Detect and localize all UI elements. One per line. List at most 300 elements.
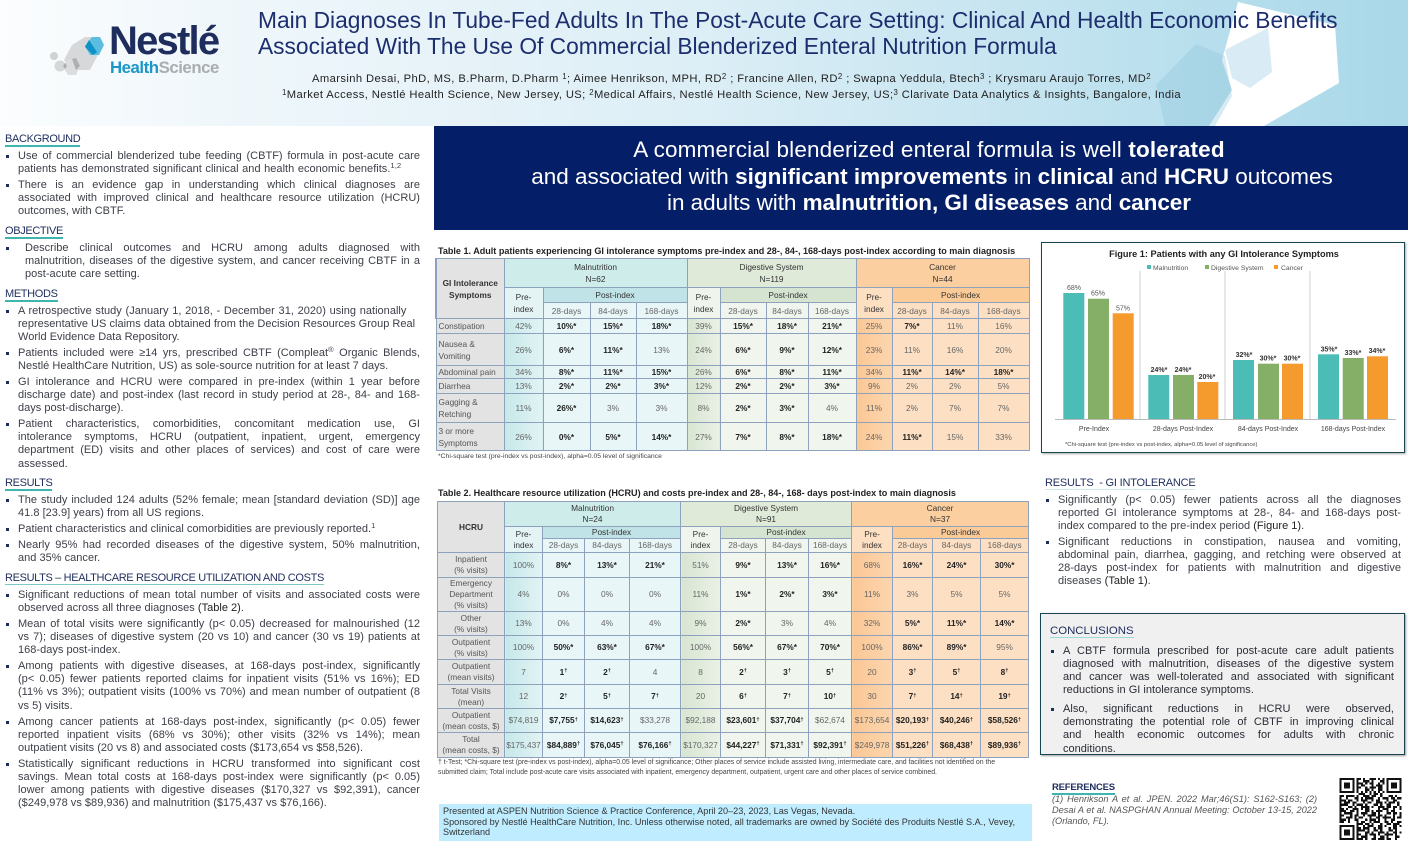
table 1: 18%*: [822, 432, 842, 442]
methods text 4: [18, 418, 420, 470]
table 2: 7†: [651, 691, 659, 701]
table 2: $7,755†: [549, 715, 578, 725]
table 2: N=91: [756, 514, 776, 524]
HCRU text 3: (p< 0.05) fewer patients reported claims for inpatient visits (51% vs 16%); ED: [18, 672, 420, 684]
HCRU text 3: (11% vs 3%); outpatient visits (100% vs 70%) and mean number of outpatient (8: [18, 686, 420, 698]
table 2: Pre-: [864, 528, 880, 538]
table 1: 11%: [947, 321, 963, 331]
HCRU text 3: Among patients with digestive diseases, at 168-days post-index, significantly: [18, 660, 420, 672]
table 2: 28-days: [728, 540, 758, 550]
table 1: 84-days: [940, 306, 970, 316]
HCRU text 2: [18, 618, 420, 656]
table 1: Pre-: [866, 292, 882, 302]
table 1: Diarrhea: [438, 381, 470, 391]
table 2: (mean costs, $): [442, 745, 500, 755]
table 2 title: Table 2. Healthcare resource utilization (HCRU) and costs pre-index and 28-, 84-, 168- days post-index to main diagnosis: [438, 488, 956, 498]
table 2: 10†: [824, 691, 836, 701]
figure 1 chart: 30%*: [1284, 356, 1301, 362]
table 1: 2%*: [605, 381, 621, 391]
table 1: 7%: [998, 403, 1010, 413]
key message banner: [434, 126, 1408, 230]
results text 2: Patient characteristics and clinical comorbidities are previously reported.1: [18, 521, 375, 534]
table 1: Malnutrition: [574, 262, 617, 272]
table 1: 3%*: [824, 381, 840, 391]
table 1: N=62: [585, 274, 606, 284]
table 1: 33%: [995, 432, 1012, 442]
conclusion 2: conditions.: [1063, 743, 1116, 755]
table 2: (mean visits): [447, 672, 495, 682]
table 1: 2%: [906, 403, 918, 413]
table 1: 5%*: [605, 432, 621, 442]
axis labels: 168-days Post-Index: [1321, 426, 1386, 433]
table 2: 84-days: [772, 540, 802, 550]
table 2: (% visits): [454, 600, 488, 610]
table 2: 70%*: [820, 642, 840, 652]
table 2: 11%*: [947, 618, 966, 628]
table 1: 7%*: [904, 321, 920, 331]
references text: (1) Henrikson A et al. JPEN. 2022 Mar;46(S1): S162-S163; (2): [1052, 794, 1317, 804]
table 2: 11%: [693, 589, 709, 599]
GI intolerance text 1: reported GI intolerance symptoms at 28-, 84- and 168-days post-: [1058, 506, 1401, 518]
background text 2: There is an evidence gap in understanding which clinical diagnoses are: [18, 178, 420, 190]
table 1: 3 or more: [438, 426, 474, 436]
key message banner: in adults with malnutrition, GI diseases and cancer: [667, 190, 1191, 215]
legend: [1147, 265, 1304, 272]
methods text 4: Patient characteristics, comorbidities, concomitant medication use, GI: [18, 418, 420, 430]
conclusion 1: reductions in GI intolerance symptoms.: [1063, 684, 1254, 696]
table 1: 7%: [949, 403, 961, 413]
table 2: 84-days: [592, 540, 622, 550]
chart title: Figure 1: Patients with any GI Intolerance Symptoms: [1109, 249, 1339, 259]
table 2: 24%*: [947, 560, 966, 570]
table 1: 3%: [607, 403, 619, 413]
axis labels: [1079, 426, 1386, 433]
table 2: 8%*: [556, 560, 571, 570]
table 2: 100%: [513, 642, 534, 652]
table 2: 4: [653, 666, 657, 676]
methods text 3: [18, 376, 420, 414]
table 1: 14%*: [945, 367, 965, 377]
table 1: 26%: [515, 344, 532, 354]
table 2: 13%*: [777, 560, 797, 570]
table 1: 34%: [515, 367, 532, 377]
table 1: 26%: [515, 432, 532, 442]
HCRU text 5: ($249,978 vs $89,936) and malnutrition ($175,437 vs $76,166).: [18, 796, 327, 808]
table 2: $71,331†: [770, 740, 804, 750]
table 1: 7%*: [735, 432, 751, 442]
bars: 168-days: [1318, 354, 1388, 419]
table 1: Pre-: [696, 292, 711, 302]
table 2: $84,889†: [547, 740, 580, 750]
table 2: 16%*: [903, 560, 922, 570]
table 2: 0%: [649, 589, 661, 599]
table 2: 8: [698, 666, 703, 676]
table 1: 11%*: [603, 367, 623, 377]
table 1: 16%: [995, 321, 1012, 331]
axis labels: 84-days Post-Index: [1238, 426, 1299, 433]
table 1: 2%*: [559, 381, 574, 391]
table 1: 26%: [695, 367, 712, 377]
HCRU text 4: [18, 716, 420, 754]
table 2: 28-days: [549, 540, 578, 550]
chart footnote: *Chi-square test (pre-index vs post-index, alpha=0.05 level of significance): [1065, 442, 1258, 448]
GI intolerance text 2: 28-days post-index for patients with malnutrition and digestive: [1058, 562, 1401, 574]
table 2: $173,654: [855, 715, 889, 725]
table 2: 0%: [558, 589, 570, 599]
results text 1: 41.8 [23.9] years) from all US regions.: [18, 506, 204, 518]
figure 1 chart: 20%*: [1199, 374, 1216, 381]
table 1: Cancer: [929, 262, 956, 272]
table 1: 24%: [866, 432, 882, 442]
results text 1: [18, 494, 420, 520]
table 2 footnote: [438, 758, 995, 776]
table 1: 3%*: [779, 403, 795, 413]
table 2: (mean costs, $): [442, 720, 500, 730]
table 2: 5%: [951, 589, 963, 599]
table 1: 11%*: [902, 367, 922, 377]
table 2: Other: [461, 612, 481, 622]
methods text 1: [18, 304, 420, 344]
table 2: $40,246†: [940, 715, 973, 725]
table 2: 67%*: [645, 642, 665, 652]
table 2: 68%: [864, 560, 880, 570]
table 1: 6%*: [559, 344, 574, 354]
table 1: 9%*: [779, 344, 795, 354]
HCRU text 2: Mean of total visits were significantly (p< 0.05) decreased for malnourished (12: [18, 618, 420, 630]
table 1: 12%: [695, 381, 712, 391]
table 1: 2%: [906, 381, 918, 391]
table 2: $51,226†: [896, 740, 929, 750]
table 1: 34%: [866, 367, 882, 377]
table 2: 2%*: [779, 589, 795, 599]
table 2: 7†: [909, 691, 916, 701]
table 2: 4%: [649, 618, 661, 628]
table 1: 8%*: [559, 367, 574, 377]
table 2: 63%*: [597, 642, 617, 652]
table 1: 10%*: [557, 321, 576, 331]
table 1: Post-index: [941, 290, 980, 300]
HCRU text 1: [18, 588, 420, 614]
HCRU text 2: 168-days post-index.: [18, 644, 121, 656]
table 2: Pre-: [693, 528, 708, 538]
table 2: $23,601†: [726, 715, 760, 725]
table 2: 20: [867, 666, 877, 676]
background text 2: [18, 178, 420, 218]
table 2: 30%*: [995, 560, 1014, 570]
table 1: 28-days: [897, 306, 927, 316]
table 2: $92,188: [686, 715, 716, 725]
objective text: malnutrition, diseases of the digestive system, and cancer receiving CBTF in a: [25, 254, 420, 266]
table 1: 4%: [826, 403, 838, 413]
table 1: 42%: [515, 321, 532, 331]
table 1: 20%: [995, 344, 1012, 354]
table 2: 21%*: [645, 560, 665, 570]
table 2: 2%*: [735, 618, 751, 628]
table 1: 6%*: [735, 344, 751, 354]
figure 1 chart: 34%*: [1369, 348, 1386, 355]
table 2: $58,526†: [988, 715, 1021, 725]
table 2: 89%*: [947, 642, 966, 652]
table 1: 25%: [866, 321, 882, 331]
table 2: 14%*: [995, 618, 1014, 628]
table 1: 2%*: [735, 403, 751, 413]
methods text 4: intolerance symptoms, HCRU (outpatient, inpatient, urgent, emergency: [18, 430, 420, 442]
conclusion 2: and health economic outcomes for adults with chronic: [1063, 729, 1394, 741]
table 2: 84-days: [942, 540, 971, 550]
table 1: 15%*: [652, 367, 671, 377]
table 2: 30: [867, 691, 877, 701]
results text 3: and 35% cancer.: [18, 552, 100, 564]
GI intolerance text 2: Significant reductions in constipation, nausea and vomiting,: [1058, 536, 1401, 548]
table 1: 28-days: [552, 306, 581, 316]
table 1: 18%*: [994, 367, 1013, 377]
title: Main Diagnoses In Tube-Fed Adults In The Post-Acute Care Setting: Clinical And Health Economic Benefits: [258, 7, 1338, 33]
value labels: 65%: [1091, 290, 1105, 298]
figure 1 chart: 32%*: [1236, 352, 1253, 359]
background text: Use of commercial blenderized tube feeding (CBTF) formula in post-acute care: [18, 150, 420, 162]
table 2: $249,978: [855, 740, 889, 750]
conclusions panel: [1040, 613, 1405, 755]
GI intolerance text 2: diseases (Table 1).: [1058, 574, 1151, 586]
table 1: 23%: [866, 344, 882, 354]
table 2: 13%*: [597, 560, 617, 570]
table 1: Abdominal pain: [438, 367, 496, 377]
table 1: 0%*: [559, 432, 574, 442]
HCRU text 3: vs 5) visits.: [18, 700, 73, 712]
results text 1: The study included 124 adults (52% female; mean [standard deviation (SD)] age: [18, 494, 420, 506]
table 1: 3%: [656, 403, 668, 413]
table 1: 16%: [947, 344, 963, 354]
table 2: $44,227†: [726, 740, 760, 750]
table 2: $37,704†: [770, 715, 804, 725]
value labels: 68%: [1067, 285, 1081, 292]
table 2: 9%: [695, 618, 707, 628]
table 2: 7†: [783, 691, 791, 701]
table 1: 2%*: [779, 381, 795, 391]
table 2: 5†: [826, 666, 834, 676]
table 2: Total Visits: [451, 686, 491, 696]
table 2: 32%: [864, 618, 880, 628]
objective text: [25, 242, 420, 280]
table 1: Digestive System: [739, 262, 804, 272]
table 1: 11%*: [603, 344, 623, 354]
table 1: Nausea &: [438, 338, 475, 348]
key message banner: and associated with significant improvements in clinical and HCRU outcomes: [531, 164, 1333, 189]
HCRU text 2: vs 7); diseases of digestive system (20 vs 10) and cancer (30 vs 19) patients at: [18, 630, 420, 642]
table 2: [437, 501, 1029, 758]
HCRU text 3: [18, 660, 420, 712]
table 2: 3%*: [822, 589, 838, 599]
title: Associated With The Use Of Commercial Blenderized Enteral Nutrition Formula: [258, 33, 1057, 59]
table 2: 1†: [560, 666, 567, 676]
table 2: (% visits): [454, 648, 488, 658]
figure 1 chart: 24%*: [1151, 367, 1168, 374]
methods text 2: Nestlé HealthCare Nutrition, US) as sole-source nutrition for at least 7 days.: [18, 360, 388, 372]
conclusions heading: CONCLUSIONS: [1050, 624, 1134, 636]
icon: hexagons: [50, 37, 104, 75]
table 1: 168-days: [815, 306, 849, 316]
references text: (Orlando, FL).: [1052, 816, 1109, 826]
table 2: (% visits): [454, 565, 488, 575]
figure 1 chart: 30%*: [1260, 356, 1277, 362]
HCRU text 5: lower among patients with digestive diseases ($170,327 vs $92,391), cancer: [18, 784, 420, 796]
table 1: Post-index: [595, 290, 635, 300]
table 2: 100%: [690, 642, 711, 652]
table 2: 20: [696, 691, 705, 701]
QR code: [1340, 778, 1402, 840]
table 1: N=119: [759, 274, 784, 284]
table 2: 13%: [515, 618, 532, 628]
legend: Malnutrition: [1153, 265, 1188, 272]
table 2: 3†: [783, 666, 791, 676]
figure 1 panel: [1041, 242, 1405, 453]
wordmark: Nestlé: [109, 19, 218, 63]
table 2: $62,674: [815, 715, 845, 725]
table 2: Outpatient: [452, 661, 490, 671]
table 1: Symptoms: [449, 290, 491, 300]
table 2: N=37: [930, 514, 950, 524]
table 2: 100%: [513, 560, 534, 570]
disclosure box: Presented at ASPEN Nutrition Science & Practice Conference, April 20–23, 2023, Las Vegas, Nevada.: [443, 806, 855, 816]
results text 3: [18, 538, 420, 564]
table 1 footnote: *Chi-square test (pre-index vs post-index), alpha=0.05 level of significance: [438, 453, 662, 460]
methods text 2: Patients included were ≥14 yrs, prescribed CBTF (Compleat® Organic Blends,: [18, 345, 420, 358]
table 2: $20,193†: [896, 715, 929, 725]
table 1: Post-index: [768, 290, 808, 300]
background text 2: outcomes, with CBTF.: [18, 204, 125, 216]
axis labels: Pre-Index: [1079, 426, 1110, 433]
table 2: 2†: [560, 691, 567, 701]
table 1: 11%: [866, 403, 882, 413]
conclusion 2: demonstrating the potential role of CBTF in improving clinical: [1063, 716, 1394, 728]
table 2: 28-days: [898, 540, 927, 550]
table 2: $170,327: [683, 740, 718, 750]
table 1: 11%: [904, 344, 920, 354]
heading: background: BACKGROUND: [5, 132, 80, 144]
sub wordmark: HealthScience: [110, 58, 219, 77]
disclosure box: Switzerland: [443, 827, 490, 837]
table 1: 27%: [695, 432, 712, 442]
table 1: Vomiting: [438, 350, 470, 360]
bars: 28-days: [1148, 375, 1218, 419]
table 2: 100%: [861, 642, 883, 652]
results text 3: Nearly 95% had recorded diseases of the digestive system, 50% malnutrition,: [18, 538, 420, 550]
disclosure box: Sponsored by Nestlé HealthCare Nutrition, Inc. Unless otherwise noted, all trademarks are owned by Société des Produits Nestlé S.A., Vevey,: [443, 817, 1015, 827]
table 1: 21%*: [822, 321, 842, 331]
table 2: 3†: [909, 666, 916, 676]
title: [258, 7, 1338, 59]
bars: 84-days: [1233, 360, 1303, 419]
table 1: Retching: [438, 409, 471, 419]
methods text 3: discharge date) and post-index (last record in study period at 28-, 84- and 168-: [18, 388, 420, 400]
table 2: 16%*: [820, 560, 840, 570]
figure 1 chart: 35%*: [1321, 346, 1338, 354]
table 2: 4%: [824, 618, 836, 628]
table 2: index: [514, 540, 533, 550]
table 1: 2%*: [735, 381, 751, 391]
table 2: 19†: [998, 691, 1011, 701]
table 1: 11%: [516, 403, 532, 413]
methods text 2: [18, 346, 420, 372]
GI intolerance text 1: [1058, 494, 1401, 532]
heading: results: RESULTS: [5, 476, 52, 488]
HCRU text 4: Among cancer patients at 168-days post-index, significantly (p< 0.05) fewer: [18, 716, 420, 728]
table 2: (% visits): [454, 624, 488, 634]
table 1: 28-days: [728, 306, 758, 316]
references text: Desai A et al. NASPGHAN Annual Meeting: October 13-15, 2022: [1052, 805, 1317, 815]
table 2: Outpatient: [452, 710, 490, 720]
table 2: (mean): [458, 696, 484, 706]
table 1: index: [514, 304, 533, 314]
table 1: 24%: [695, 344, 712, 354]
table 1: 8%*: [779, 367, 795, 377]
table 2: 5%*: [905, 618, 920, 628]
figure 1 chart: 24%*: [1175, 367, 1192, 374]
table 1: 6%*: [735, 367, 751, 377]
conclusion 1: [1063, 645, 1394, 697]
table 2: 4%: [518, 589, 530, 599]
table 2: 168-days: [987, 540, 1022, 550]
table 2: Post-index: [941, 527, 980, 537]
table 2: 4%: [601, 618, 613, 628]
methods text 1: A retrospective study (January 1, 2018, - December 31, 2020) using nationally: [18, 304, 406, 316]
figure 1 chart: [1055, 249, 1396, 448]
table 1: N=44: [932, 274, 953, 284]
background text: [18, 150, 420, 176]
bars: pre-index: [1063, 293, 1134, 419]
references heading: REFERENCES: [1052, 782, 1115, 792]
table 1: Pre-: [516, 292, 531, 302]
table 1: 8%*: [779, 432, 795, 442]
conclusion 2: Also, significant reductions in HCRU were observed,: [1063, 703, 1394, 715]
legend: Cancer: [1281, 265, 1304, 272]
table 1: GI Intolerance: [443, 278, 498, 288]
table 2: Post-index: [766, 527, 806, 537]
table 2: 2†: [739, 666, 747, 676]
table 2: 7: [521, 666, 526, 676]
disclosure box: [439, 804, 1032, 841]
methods text 3: GI intolerance and HCRU were compared in pre-index (within 1 year before: [18, 376, 420, 388]
objective text: post-acute care setting.: [25, 268, 140, 280]
table 1: 168-days: [986, 306, 1021, 316]
table 1: 15%*: [603, 321, 623, 331]
table 2: Cancer: [927, 503, 953, 513]
table 2: 5%: [999, 589, 1011, 599]
table 2: 3%: [907, 589, 919, 599]
table 2: 168-days: [638, 540, 672, 550]
affiliations: 1Market Access, Nestlé Health Science, New Jersey, US; 2Medical Affairs, Nestlé Health Science, New Jersey, US;3 Clarivate Data Analytics & Insights, Bangalore, India: [282, 88, 1181, 101]
table 1: 12%*: [822, 344, 842, 354]
table 2: 8†: [1001, 666, 1008, 676]
table 2: $76,166†: [638, 740, 672, 750]
table 1: 11%*: [902, 432, 922, 442]
table 2: $33,278: [640, 715, 670, 725]
table 2: index: [862, 540, 882, 550]
heading: results GI intolerance: RESULTS - GI INTOLERANCE: [1045, 476, 1195, 488]
HCRU text 5: Statistically significant reductions in HCRU transformed into significant cost: [18, 758, 420, 770]
table 1: [435, 258, 1030, 451]
table 1: 15%: [947, 432, 963, 442]
logo: Nestle Health Science: [50, 19, 219, 77]
table 2: $14,623†: [590, 715, 624, 725]
table 2: 12: [519, 691, 528, 701]
table 2: $92,391†: [813, 740, 847, 750]
value labels: 57%: [1116, 306, 1130, 312]
table 2 footnote: † t-Test; *Chi-square test (pre-index vs post-index), alpha=0.05 level of significance; Other places of service include assisted living, intermediate care, and facilities not identified on the: [438, 759, 995, 766]
table 1 title: Table 1. Adult patients experiencing GI intolerance symptoms pre-index and 28-, 84-, 168-days post-index according to main diagnosis: [438, 246, 1015, 256]
table 1: 39%: [695, 321, 712, 331]
table 1: 15%*: [733, 321, 753, 331]
